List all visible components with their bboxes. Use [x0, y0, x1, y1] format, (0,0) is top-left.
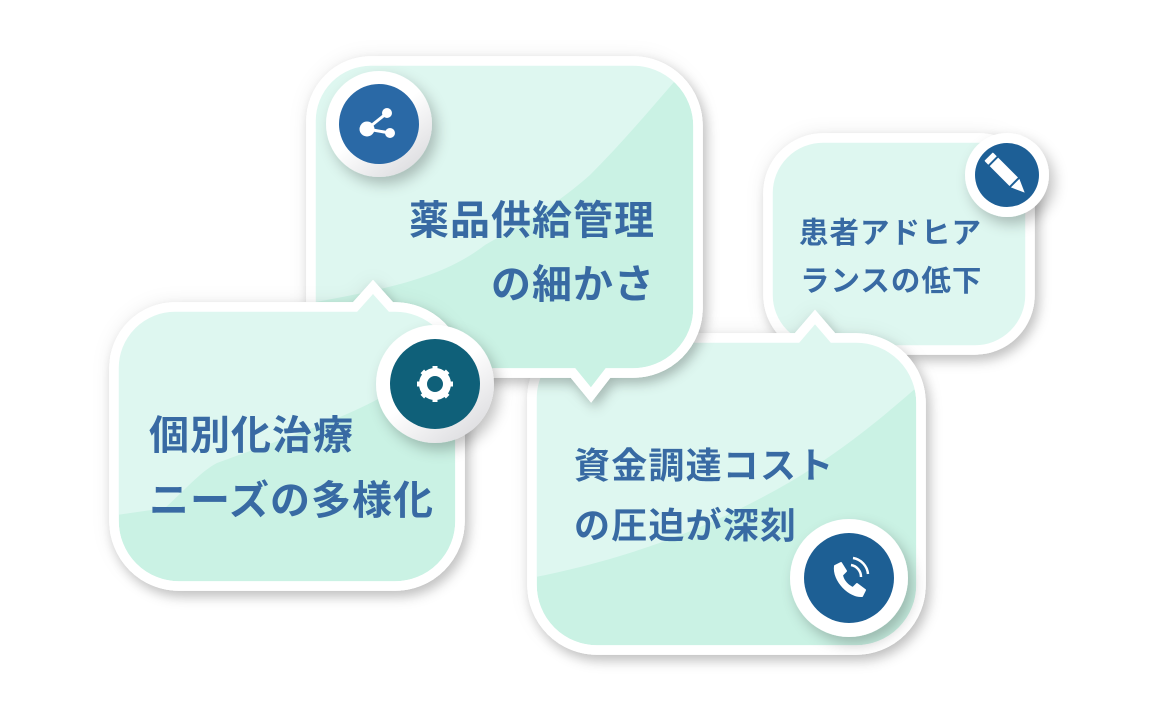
bubble shape — [768, 138, 1030, 350]
text: granularity of drug supply management: の細かさ — [491, 263, 655, 307]
text: diversifying personalized therapy needs: ニーズの多様化 — [149, 479, 434, 523]
text: patient adherence decline: ランスの低下 — [800, 265, 982, 298]
white bubble outline — [532, 317, 921, 650]
panel: personalized therapy needs bubble — [110, 287, 494, 586]
white bubble outline — [311, 61, 698, 395]
panel: funding cost bubble — [520, 317, 925, 650]
icon: phone badge — [790, 519, 908, 637]
text: patient adherence decline — [799, 217, 982, 298]
glossy highlight — [119, 295, 432, 514]
bubble shape — [311, 61, 698, 395]
panel: patient adherence bubble — [768, 133, 1049, 350]
text: diversifying personalized therapy needs — [149, 414, 434, 523]
glossy highlight — [520, 320, 925, 580]
text: granularity of drug supply management — [409, 199, 655, 307]
glossy highlight — [316, 66, 674, 302]
text: patient adherence decline: 患者アドヒア — [799, 217, 982, 250]
text: funding cost pressure — [574, 445, 834, 546]
text: funding cost pressure: 資金調達コスト — [574, 445, 834, 486]
white bubble outline — [114, 287, 460, 586]
icon: gear badge — [376, 325, 494, 443]
text: funding cost pressure: の圧迫が深刻 — [574, 505, 797, 546]
icon: share badge — [326, 71, 432, 177]
icon: pencil badge — [965, 133, 1049, 217]
bubble shape — [532, 317, 921, 650]
text: granularity of drug supply management: 薬品供給管理 — [409, 199, 655, 243]
text: diversifying personalized therapy needs: 個別化治療 — [149, 414, 354, 458]
bubble shape — [114, 287, 460, 586]
panel: drug supply management bubble — [300, 50, 698, 395]
